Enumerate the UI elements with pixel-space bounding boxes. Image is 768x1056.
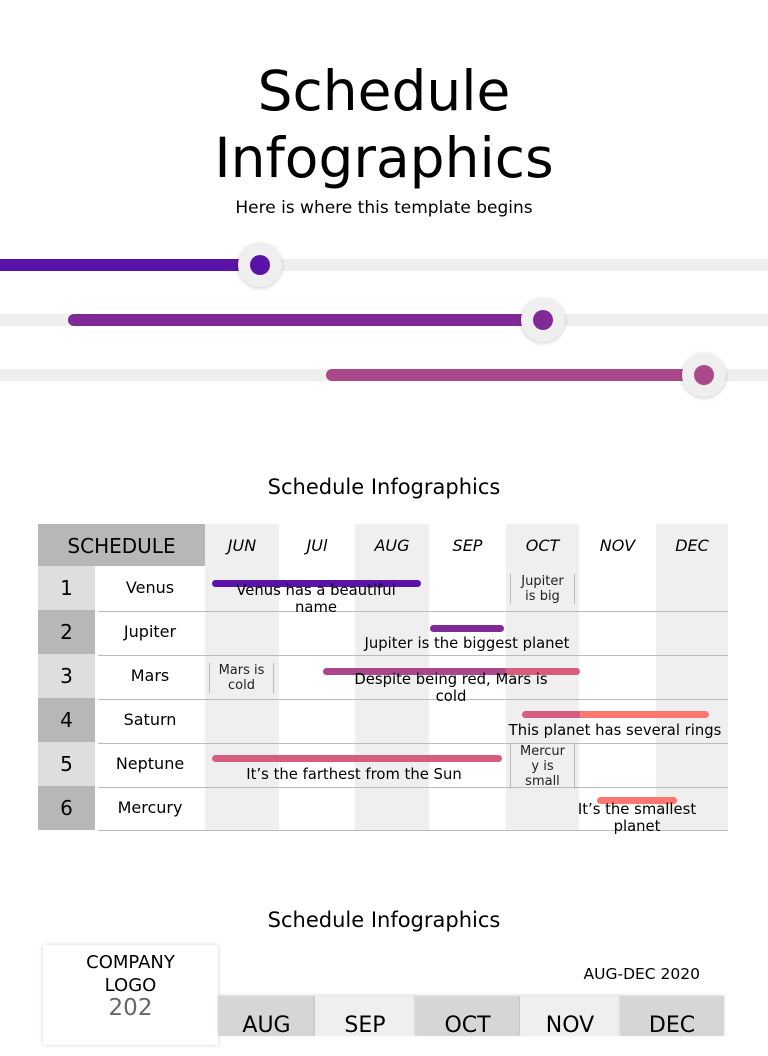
text: OCT xyxy=(444,1013,491,1038)
callout: Mars is cold: cold xyxy=(228,678,255,693)
callout: Mars is cold: Mars is xyxy=(219,663,264,678)
schedule table: JUN xyxy=(228,536,256,555)
schedule table xyxy=(38,524,728,835)
schedule table: JUl xyxy=(307,536,327,555)
schedule table: Mercury xyxy=(118,798,182,817)
text: SEP xyxy=(344,1013,386,1038)
schedule table: 4 xyxy=(60,708,73,732)
callout: Mercury is small: Mercur xyxy=(520,744,565,759)
header xyxy=(38,524,205,566)
callout: Jupiter is big: is big xyxy=(525,589,560,604)
schedule table: SEP xyxy=(453,536,482,555)
schedule table: Neptune xyxy=(116,754,184,773)
month tabs xyxy=(217,994,725,1038)
section heading 2: Schedule Infographics xyxy=(268,908,500,932)
schedule table: Jupiter xyxy=(124,622,176,641)
schedule table: DEC xyxy=(675,536,709,555)
schedule table: NOV xyxy=(600,536,635,555)
row 5 bar xyxy=(212,755,502,762)
company logo box: LOGO xyxy=(105,975,156,996)
callout: Jupiter is big: Jupiter xyxy=(521,574,564,589)
schedule table: OCT xyxy=(526,536,559,555)
schedule table: Venus has a beautiful name xyxy=(236,582,396,616)
row 4 bar xyxy=(522,711,709,718)
schedule table: It’s the farthest from the Sun xyxy=(246,766,462,783)
company logo box xyxy=(43,945,218,1045)
schedule table: It’s the smallest planet xyxy=(578,801,696,835)
schedule table: AUG xyxy=(374,536,410,555)
section heading 1: Schedule Infographics xyxy=(268,475,500,499)
schedule table: 5 xyxy=(60,752,73,776)
callout: Mars is cold xyxy=(209,663,274,693)
schedule table: Saturn xyxy=(124,710,176,729)
schedule table: Jupiter is the biggest planet xyxy=(365,635,569,652)
schedule table: 1 xyxy=(60,576,73,600)
company logo box: 202 xyxy=(109,995,152,1021)
callout: Mercury is small: small xyxy=(525,774,560,789)
text: AUG xyxy=(242,1013,291,1038)
subtitle: Here is where this template begins xyxy=(235,198,533,218)
slider 2 xyxy=(0,297,768,345)
schedule table: 2 xyxy=(60,620,73,644)
schedule table: Mars xyxy=(131,666,169,685)
schedule table: Venus xyxy=(126,578,174,597)
company logo box: COMPANY xyxy=(86,952,175,973)
slider 1 xyxy=(0,242,768,290)
callout: Mercury is small xyxy=(510,744,575,789)
sliders xyxy=(0,242,768,400)
row 6 bar xyxy=(597,797,677,804)
row 1 bar xyxy=(212,580,421,587)
header: SCHEDULE xyxy=(67,534,176,558)
text: DEC xyxy=(649,1013,695,1038)
callout: Mercury is small: y is xyxy=(531,759,554,774)
title: Infographics xyxy=(214,126,554,190)
row 2 bar xyxy=(430,625,504,632)
schedule table: 3 xyxy=(60,664,73,688)
slider 3 xyxy=(0,352,768,400)
title: Schedule xyxy=(258,59,510,123)
schedule table: 6 xyxy=(60,796,73,820)
schedule table: Despite being red, Mars is cold xyxy=(354,671,548,705)
callout: Jupiter is big xyxy=(510,574,575,604)
date label: AUG-DEC 2020 xyxy=(584,965,700,983)
title xyxy=(214,59,554,190)
row 3 bar xyxy=(323,668,580,675)
schedule table: This planet has several rings xyxy=(509,722,721,739)
text: NOV xyxy=(546,1013,594,1038)
